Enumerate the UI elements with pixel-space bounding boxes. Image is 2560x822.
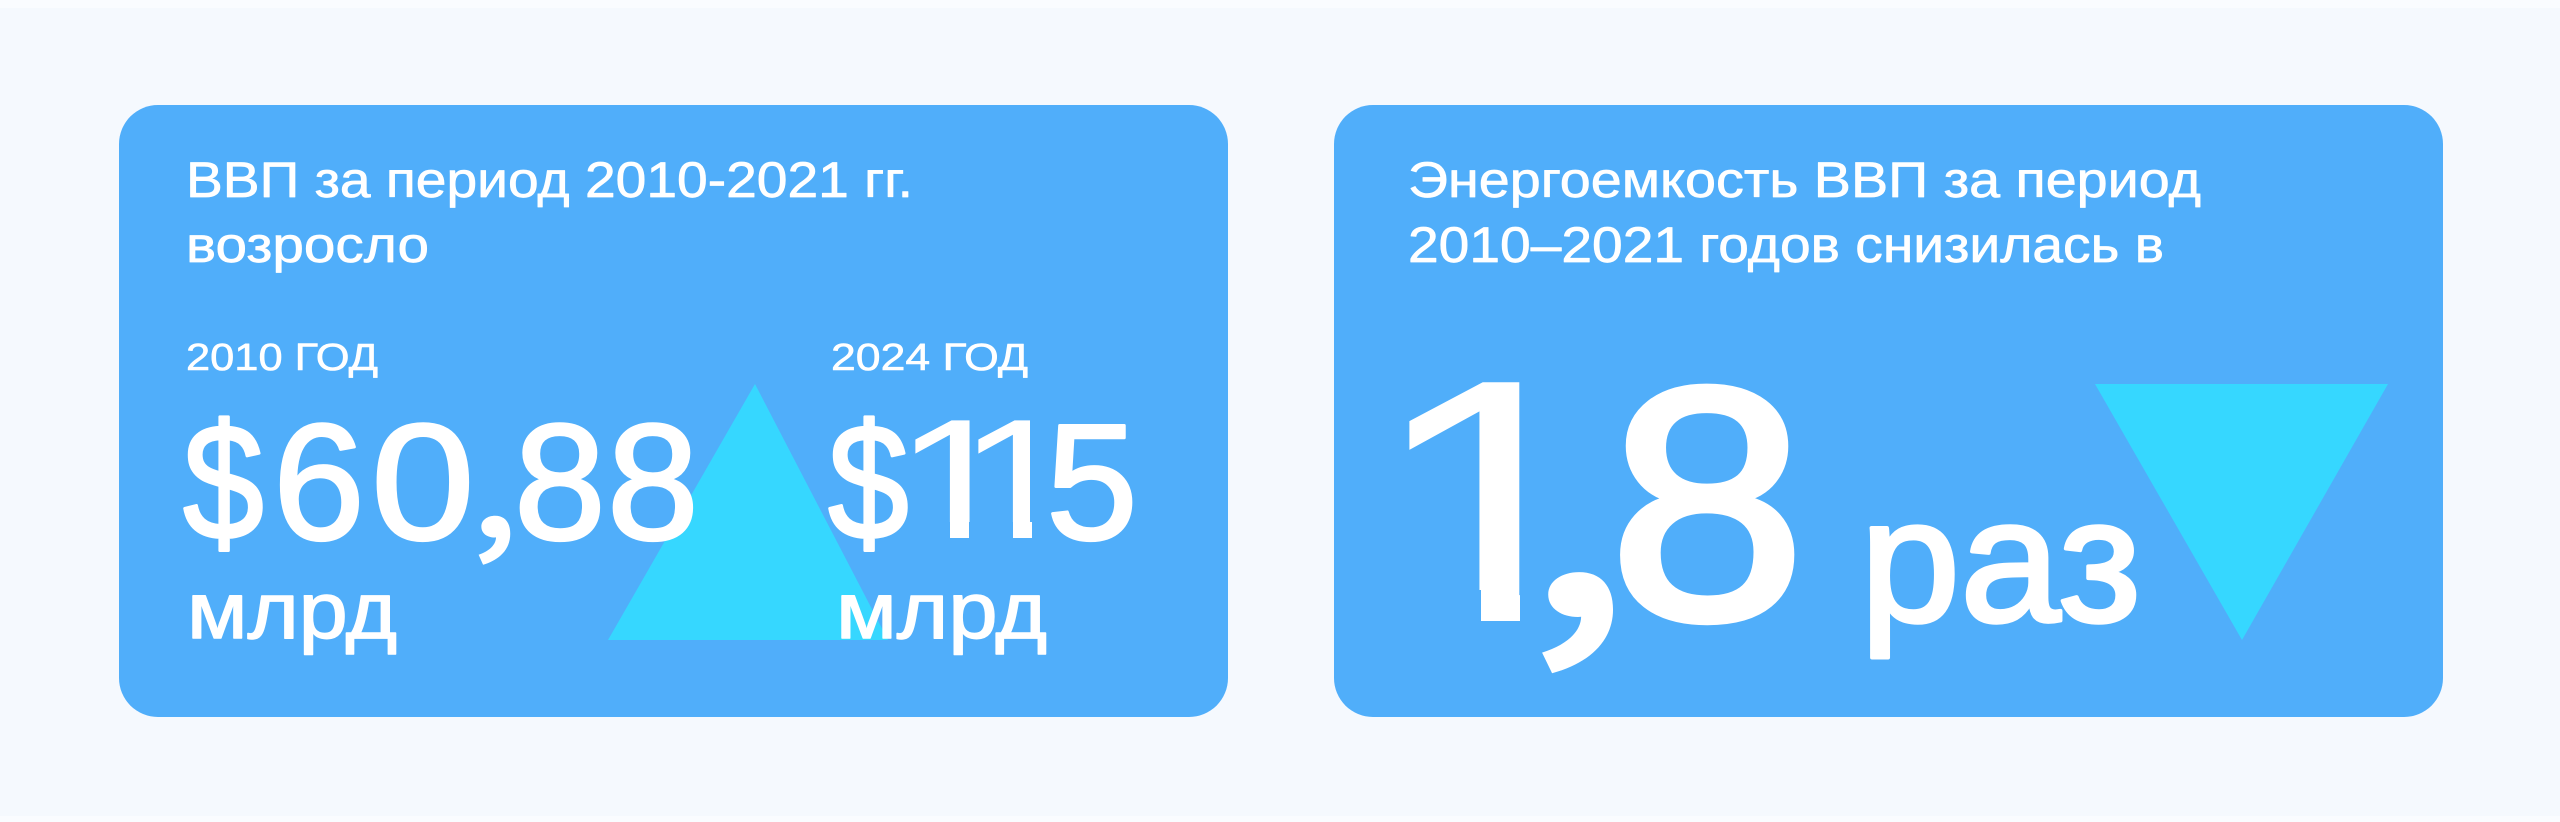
- value: 2024 GDP: [828, 415, 1132, 552]
- value: 1,8: [1409, 382, 1794, 674]
- label: 2024: 2024 ГОД: [831, 337, 1028, 379]
- icon: up triangle: [608, 384, 888, 640]
- panel background: [119, 105, 1228, 717]
- value: 2010 GDP: [183, 389, 699, 575]
- unit: billion 2010: млрд: [187, 566, 397, 655]
- value: 1,8: 1: [1366, 308, 1617, 695]
- value: 2010 GDP: ,: [471, 393, 518, 574]
- value: 2024 GDP: $: [828, 389, 909, 574]
- heading: GDP growth: возросло: [186, 217, 429, 273]
- panel: GDP growth: [119, 105, 1228, 717]
- panel background: [1334, 105, 2443, 717]
- heading: energy intensity: 2010–2021 годов снизилась в: [1408, 217, 2164, 273]
- value: 2010 GDP: 6: [273, 390, 365, 574]
- value: 2010 GDP: 8: [514, 390, 606, 574]
- heading: GDP growth: [186, 152, 913, 273]
- value: 2024 GDP: 1: [894, 384, 1018, 575]
- heading: energy intensity: [1408, 152, 2201, 273]
- value: 2010 GDP: $: [183, 389, 264, 574]
- panel: energy intensity: [1334, 105, 2443, 717]
- unit: times: раз: [1860, 463, 2141, 659]
- value: 1,8: 8: [1609, 321, 1805, 688]
- value: 2024 GDP: 1: [957, 384, 1081, 575]
- value: 2010 GDP: 8: [607, 390, 699, 574]
- label: 2010: 2010 ГОД: [186, 337, 378, 379]
- value: 2024 GDP: 5: [1046, 390, 1138, 574]
- unit: billion 2024: млрд: [836, 566, 1047, 655]
- heading: energy intensity: Энергоемкость ВВП за период: [1408, 152, 2201, 208]
- heading: GDP growth: ВВП за период 2010-2021 гг.: [186, 152, 913, 208]
- value: 2010 GDP: 0: [371, 391, 475, 575]
- icon: down triangle: [2095, 384, 2388, 640]
- value: 1,8: ,: [1525, 319, 1630, 693]
